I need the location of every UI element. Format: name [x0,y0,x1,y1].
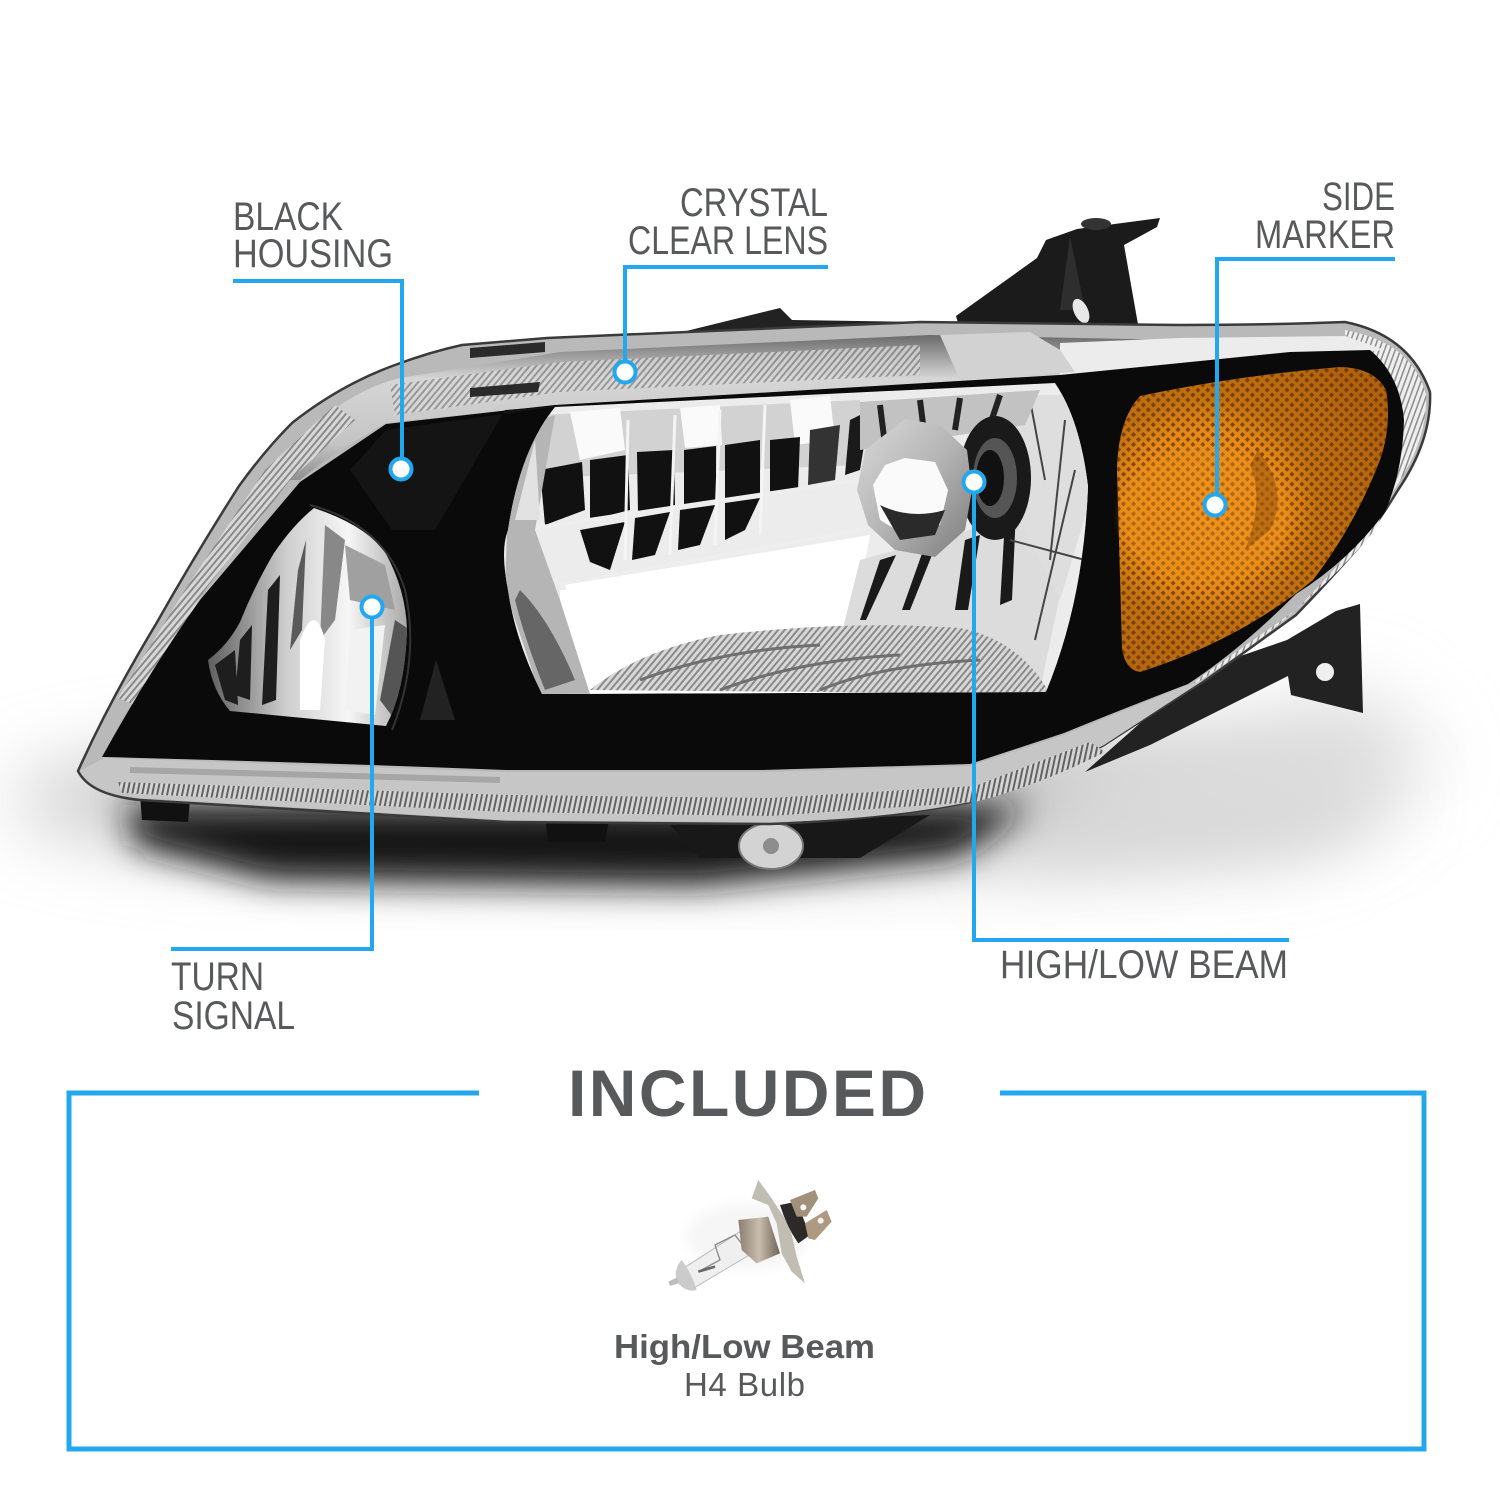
right radial facets [844,522,1059,680]
callout: crystal clear lens [614,181,828,382]
seal [780,1202,810,1243]
bulb caption: H4 Bulb [684,1366,805,1403]
label: turn signal [171,955,295,1038]
label: black housing [233,195,393,276]
glass [683,1232,755,1288]
callout: side marker [1204,175,1395,516]
heading: included: INCLUDED [568,1056,926,1130]
left reflector edge [505,415,590,694]
dark tab on top lens [470,342,545,358]
right mounting tab [1085,604,1363,772]
label: side marker: MARKER [1255,213,1395,257]
label: side marker: SIDE [1322,175,1395,219]
black bulb ring [959,416,1031,540]
label: side marker [1255,175,1395,257]
headlight illustration [78,218,1430,869]
label: black housing: BLACK [233,195,343,239]
dark facet cells [540,425,840,570]
lower white center [565,535,870,590]
label: crystal clear lens [628,181,828,263]
main reflector [495,375,1095,700]
clear outer lens [78,322,1430,824]
included frame [69,1093,1424,1449]
housing ridge [420,660,455,720]
rear dark clips on top edge [670,308,920,345]
icon: H4 bulb [668,1180,832,1291]
bulb caption: High/Low Beam [614,1328,875,1365]
callout: black housing [233,195,412,480]
bottom clips and nub [140,795,930,869]
base [738,1217,780,1263]
top lens hatch band [260,335,1180,480]
amber side marker [1117,367,1388,672]
ground shadow [10,690,1440,885]
tip [676,1260,697,1291]
reflector upper facet band [540,400,860,478]
chrome bulb cap [857,419,972,557]
turn signal reflector [205,505,410,730]
top mounting bracket [956,218,1160,330]
lower clear lens band [80,680,1204,822]
panel: included [69,1056,1424,1449]
callout: high/low beam [964,472,1289,987]
callout: turn signal [171,596,382,1038]
label: crystal clear lens: CLEAR LENS [628,219,828,263]
lower textured crescent [590,625,1050,694]
flange [752,1180,805,1283]
terminals [790,1190,818,1217]
clear corner of top lens [1060,336,1385,378]
label: crystal clear lens: CRYSTAL [680,181,828,225]
label: turn signal: TURN [171,955,264,999]
label: high/low beam: HIGH/LOW BEAM [1000,943,1288,987]
label: black housing: HOUSING [233,232,393,276]
left lens rim hatching [118,405,355,705]
label: turn signal: SIGNAL [172,994,295,1038]
black housing [102,350,1404,770]
right clear rim [1185,330,1426,690]
housing arc around turn signal [310,505,410,730]
bulb caption [614,1328,875,1403]
